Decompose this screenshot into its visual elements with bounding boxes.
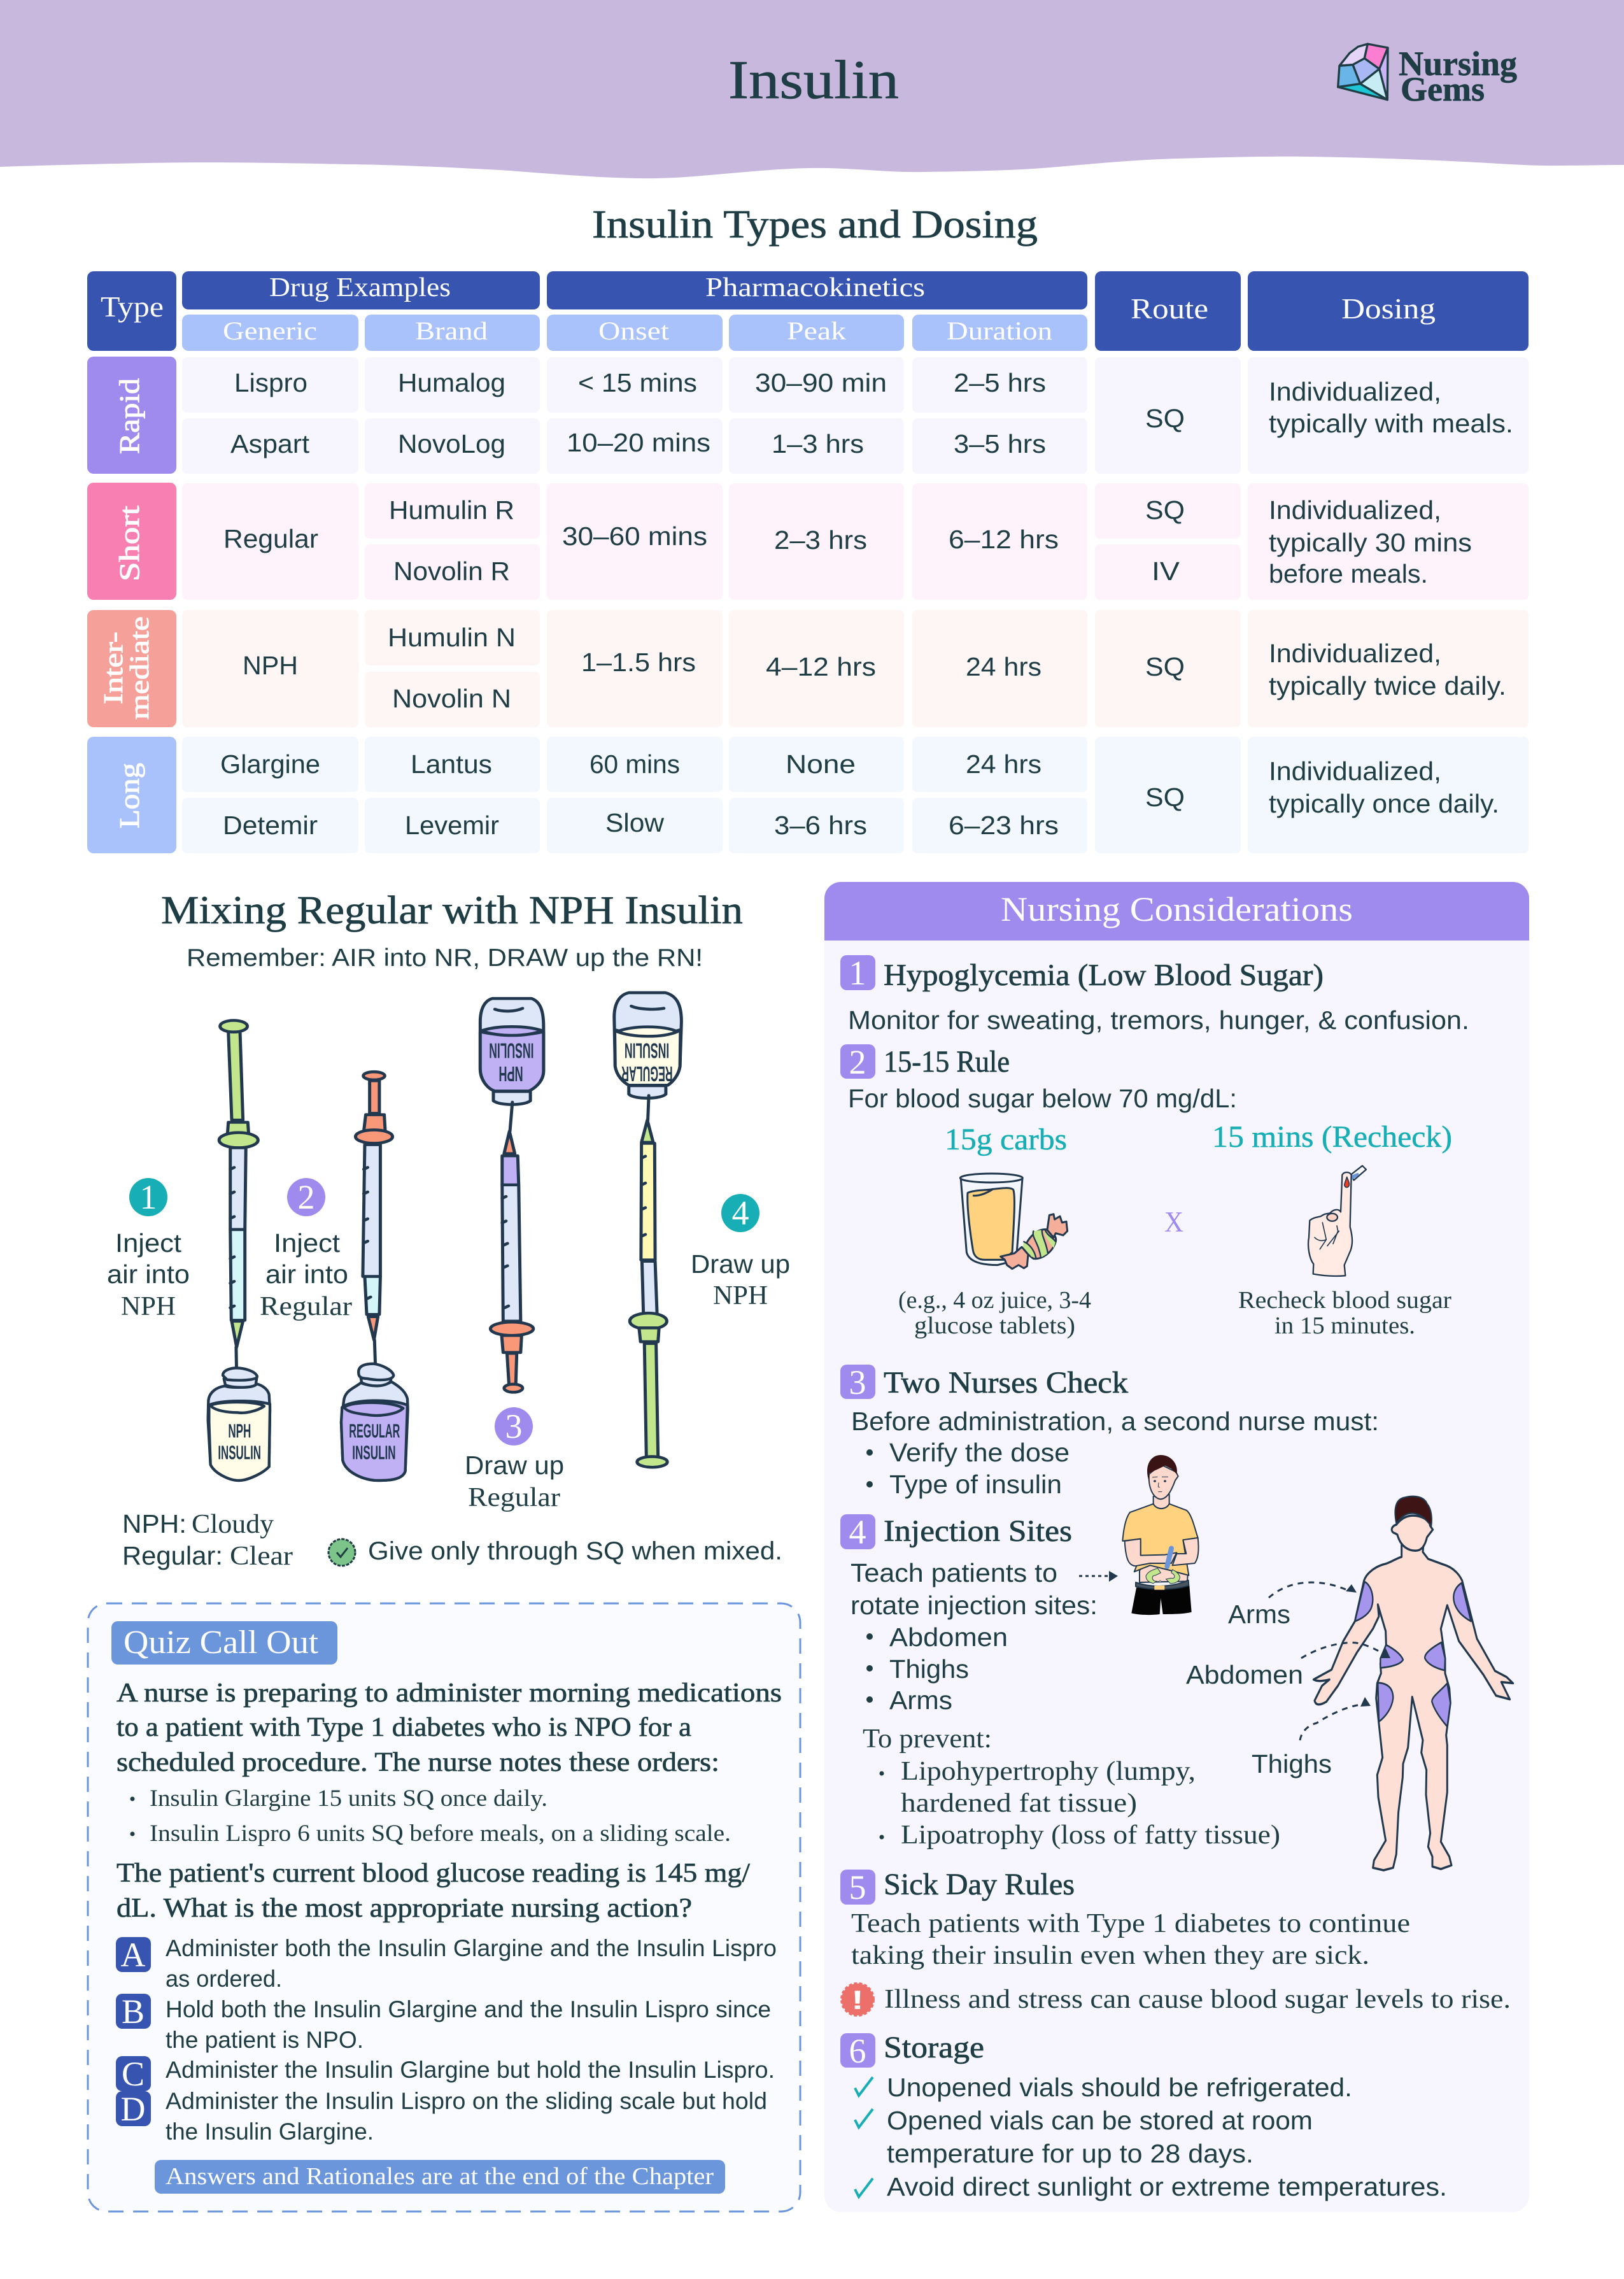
step 2: 2 bbox=[298, 1178, 314, 1216]
item 4: injection sites: 4 bbox=[849, 1513, 866, 1551]
syringe 2 bbox=[355, 1072, 393, 1368]
syringe 4 with inverted Regular vial: REGULAR bbox=[621, 1061, 673, 1085]
label: thighs: Thighs bbox=[1252, 1749, 1332, 1778]
row: Short: 30–60 mins bbox=[562, 522, 707, 551]
quiz orders list: Insulin Lispro 6 units SQ before meals, on a sliding scale. bbox=[150, 1821, 731, 1847]
row: Intermediate: mediate bbox=[125, 616, 155, 720]
option D: D bbox=[121, 2090, 145, 2128]
row: Intermediate: Individualized, bbox=[1269, 639, 1441, 668]
row: Long: 3–6 hrs bbox=[774, 811, 867, 840]
panel: nursing considerations bbox=[824, 882, 1529, 2212]
item 2: 15-15 rule: For blood sugar below 70 mg/dL: bbox=[848, 1084, 1237, 1113]
option A: Administer both the Insulin Glargine and the Insulin Lispro bbox=[166, 1935, 777, 1961]
row: Long: Individualized, bbox=[1269, 756, 1441, 786]
row: Intermediate: Inter- bbox=[99, 632, 129, 704]
vial: NPH: NPH bbox=[228, 1420, 251, 1442]
step 1: NPH bbox=[121, 1292, 176, 1321]
row: Intermediate: typically twice daily. bbox=[1269, 671, 1506, 700]
item 5: sick day rules: Illness and stress can cause blood sugar levels to rise. bbox=[884, 1985, 1511, 2014]
storage checklist: Opened vials can be stored at room bbox=[887, 2106, 1313, 2135]
table header row: Generic bbox=[223, 316, 317, 345]
row: Long: 24 hrs bbox=[966, 749, 1041, 779]
option A bbox=[116, 1935, 777, 1992]
row: Short: Novolin R bbox=[393, 557, 510, 586]
item 5: sick day rules bbox=[840, 1868, 1511, 2015]
item 4: injection sites: Injection Sites bbox=[884, 1514, 1072, 1548]
step 1: air into bbox=[107, 1260, 190, 1289]
table header row: Onset bbox=[598, 316, 669, 345]
item 4: injection sites: rotate injection sites: bbox=[851, 1591, 1098, 1620]
step 3 bbox=[465, 1407, 564, 1512]
table header row: Peak bbox=[787, 316, 846, 345]
icon: alert: ! bbox=[851, 1985, 864, 2015]
item 2: 15-15 rule bbox=[840, 1043, 1452, 1339]
row: Long: Long bbox=[114, 763, 145, 828]
item 3: two nurses check: Verify the dose bbox=[889, 1438, 1070, 1467]
option B: Hold both the Insulin Glargine and the Insulin Lispro since bbox=[166, 1996, 771, 2022]
option D: Administer the Insulin Lispro on the sliding scale but hold bbox=[166, 2088, 767, 2114]
label: abdomen: Abdomen bbox=[1186, 1660, 1303, 1689]
row: Short: SQ bbox=[1145, 495, 1185, 525]
arrow to patient bbox=[1079, 1571, 1118, 1582]
step 3: 3 bbox=[505, 1407, 522, 1445]
row: Long: None bbox=[786, 749, 856, 779]
label: arms bbox=[1228, 1582, 1357, 1629]
title: Insulin bbox=[728, 49, 899, 110]
step 4: 4 bbox=[732, 1194, 749, 1232]
row: Long: Glargine bbox=[220, 749, 320, 779]
legend: cloudy vs clear: NPH: bbox=[122, 1509, 187, 1538]
option A: as ordered. bbox=[166, 1966, 282, 1992]
syringe 1 bbox=[219, 1020, 258, 1375]
vial: Regular: INSULIN bbox=[352, 1442, 396, 1464]
step 2: Inject bbox=[274, 1228, 341, 1258]
item 2: 15-15 rule: 2 bbox=[849, 1043, 866, 1081]
row: Long: 6–23 hrs bbox=[949, 811, 1059, 840]
item 5: sick day rules: 5 bbox=[849, 1868, 866, 1906]
row: Intermediate: NPH bbox=[243, 651, 298, 680]
panel header: Nursing Considerations bbox=[1001, 890, 1353, 928]
logo: Nursing Gems bbox=[1338, 44, 1517, 108]
table header row: Pharmacokinetics bbox=[705, 273, 925, 302]
step 4: NPH bbox=[713, 1281, 768, 1310]
row: Intermediate: 4–12 hrs bbox=[766, 652, 876, 681]
table header row: Brand bbox=[415, 316, 488, 345]
15g carbs label: 15g carbs bbox=[945, 1123, 1067, 1156]
option C bbox=[116, 2055, 775, 2093]
row: Rapid: Humalog bbox=[398, 368, 505, 397]
vial: NPH and Regular insulin bbox=[208, 1364, 408, 1480]
option D bbox=[116, 2088, 767, 2145]
icon: body injection site map bbox=[1313, 1496, 1513, 1870]
quiz orders list: Insulin Glargine 15 units SQ once daily. bbox=[150, 1786, 547, 1812]
panel: quiz call out bbox=[88, 1603, 800, 2212]
step 1: Inject bbox=[115, 1228, 182, 1258]
row: Long: 60 mins bbox=[590, 749, 680, 779]
item 4: injection sites: Abdomen bbox=[889, 1622, 1008, 1652]
row: Short: Regular bbox=[223, 524, 318, 553]
item 4: injection sites: Lipohypertrophy (lumpy, bbox=[901, 1757, 1196, 1786]
legend: cloudy vs clear: Clear bbox=[230, 1542, 293, 1571]
icon: green check badge bbox=[328, 1539, 355, 1566]
syringe 4 with inverted Regular vial bbox=[614, 993, 681, 1467]
row: Long: Slow bbox=[605, 808, 664, 837]
item 3: two nurses check bbox=[840, 1363, 1379, 1499]
icon: finger blood test bbox=[1308, 1166, 1366, 1276]
item 1: hypoglycemia bbox=[840, 954, 1469, 1035]
syringe 4 with inverted Regular vial: INSULIN bbox=[625, 1039, 669, 1062]
quiz scenario bbox=[117, 1679, 782, 1777]
row: Short: IV bbox=[1152, 557, 1180, 586]
label: arms: Arms bbox=[1228, 1600, 1290, 1629]
answers note: Answers and Rationales are at the end of the Chapter bbox=[166, 2163, 714, 2190]
row: Long bbox=[87, 737, 1529, 853]
caption: carbs bbox=[898, 1287, 1091, 1339]
row: Short: Short bbox=[114, 506, 145, 581]
option C: Administer the Insulin Glargine but hold the Insulin Lispro. bbox=[166, 2057, 775, 2083]
item 3: two nurses check: Two Nurses Check bbox=[884, 1366, 1128, 1400]
caption: recheck bbox=[1238, 1287, 1451, 1339]
label: abdomen bbox=[1186, 1643, 1390, 1689]
quiz scenario: A nurse is preparing to administer morning medications bbox=[117, 1679, 782, 1708]
item 1: hypoglycemia: Hypoglycemia (Low Blood Sugar) bbox=[884, 958, 1324, 992]
row: Intermediate: Humulin N bbox=[388, 623, 516, 652]
syringe 3 with inverted NPH vial bbox=[480, 998, 544, 1392]
row: Rapid: < 15 mins bbox=[578, 368, 697, 397]
row: Short: Humulin R bbox=[389, 495, 514, 525]
note: give only through SQ: Give only through SQ when mixed. bbox=[368, 1537, 782, 1565]
row: Intermediate bbox=[87, 610, 1529, 727]
syringe 3 with inverted NPH vial: NPH bbox=[498, 1061, 523, 1085]
storage checklist bbox=[855, 2073, 1447, 2201]
item 6: storage: 6 bbox=[849, 2032, 866, 2070]
row: Rapid: Individualized, bbox=[1269, 377, 1441, 406]
row: Long: typically once daily. bbox=[1269, 789, 1499, 818]
item 1: hypoglycemia: 1 bbox=[849, 954, 866, 992]
quiz question bbox=[117, 1859, 750, 1923]
icon: alert bbox=[842, 1984, 873, 2015]
quiz tag bbox=[111, 1621, 337, 1665]
item 4: injection sites: Thighs bbox=[889, 1654, 969, 1684]
mnemonic: Remember: AIR into NR, DRAW up the RN! bbox=[187, 944, 703, 972]
icon: patient injecting abdomen bbox=[1122, 1455, 1199, 1615]
storage checklist: temperature for up to 28 days. bbox=[887, 2139, 1253, 2168]
illustration: syringes bbox=[219, 993, 681, 1467]
step 1: 1 bbox=[140, 1178, 157, 1216]
row: Rapid: typically with meals. bbox=[1269, 409, 1513, 438]
table header row bbox=[87, 271, 1529, 351]
header banner bbox=[0, 0, 1624, 178]
15 mins label: 15 mins (Recheck) bbox=[1212, 1120, 1452, 1154]
item 6: storage bbox=[840, 2031, 1447, 2201]
row: Short: before meals. bbox=[1269, 559, 1428, 588]
row: Rapid: Rapid bbox=[114, 378, 145, 454]
option D: the Insulin Glargine. bbox=[166, 2119, 374, 2145]
item 3: two nurses check: Before administration, a second nurse must: bbox=[851, 1407, 1379, 1436]
item 4: injection sites: Lipoatrophy (loss of fatty tissue) bbox=[901, 1821, 1280, 1850]
table header row: Duration bbox=[947, 316, 1052, 345]
heading: mixing: Mixing Regular with NPH Insulin bbox=[161, 889, 743, 932]
step 3: Draw up bbox=[465, 1451, 564, 1480]
vial: NPH bbox=[208, 1368, 270, 1480]
operator X: X bbox=[1164, 1205, 1183, 1238]
step 1 bbox=[107, 1178, 190, 1321]
step 2 bbox=[260, 1178, 352, 1321]
option B: B bbox=[122, 1992, 145, 2031]
row: Long: Lantus bbox=[411, 749, 492, 779]
item 4: injection sites: hardened fat tissue) bbox=[901, 1789, 1137, 1818]
row: Short: Individualized, bbox=[1269, 495, 1441, 525]
row: Rapid: Aspart bbox=[230, 429, 310, 458]
caption: recheck: in 15 minutes. bbox=[1274, 1312, 1415, 1339]
item 4: injection sites: Teach patients to bbox=[851, 1558, 1057, 1587]
quiz scenario: to a patient with Type 1 diabetes who is NPO for a bbox=[117, 1713, 691, 1742]
syringe 3 with inverted NPH vial: INSULIN bbox=[489, 1039, 534, 1062]
item 3: two nurses check: 3 bbox=[849, 1363, 866, 1402]
row: Intermediate: 1–1.5 hrs bbox=[581, 648, 696, 677]
row: Short: typically 30 mins bbox=[1269, 528, 1472, 557]
option A: A bbox=[121, 1936, 145, 1974]
quiz question: dL. What is the most appropriate nursing action? bbox=[117, 1894, 692, 1923]
logo: Nursing Gems: Gems bbox=[1401, 70, 1485, 108]
item 1: hypoglycemia: Monitor for sweating, tremors, hunger, & confusion. bbox=[848, 1005, 1469, 1035]
caption: recheck: Recheck blood sugar bbox=[1238, 1287, 1451, 1314]
storage checklist: Avoid direct sunlight or extreme temperatures. bbox=[887, 2172, 1447, 2201]
item 5: sick day rules: Sick Day Rules bbox=[884, 1868, 1075, 1901]
step 2: Regular bbox=[260, 1292, 352, 1321]
option B bbox=[116, 1992, 771, 2053]
item 2: 15-15 rule: 15-15 Rule bbox=[884, 1045, 1010, 1079]
vial: NPH: INSULIN bbox=[218, 1442, 261, 1464]
storage checklist: Unopened vials should be refrigerated. bbox=[887, 2073, 1352, 2102]
quiz question: The patient's current blood glucose reading is 145 mg/ bbox=[117, 1859, 750, 1888]
item 5: sick day rules: taking their insulin even when they are sick. bbox=[851, 1941, 1369, 1970]
caption: carbs: glucose tablets) bbox=[914, 1312, 1075, 1339]
row: Intermediate: 24 hrs bbox=[966, 652, 1041, 681]
label: thighs bbox=[1252, 1697, 1371, 1778]
item 5: sick day rules: Teach patients with Type 1 diabetes to continue bbox=[851, 1909, 1410, 1938]
option C: C bbox=[122, 2055, 145, 2093]
item 3: two nurses check: Type of insulin bbox=[889, 1470, 1062, 1499]
icon: juice glass and candy bbox=[960, 1174, 1068, 1269]
row: Short bbox=[87, 483, 1529, 600]
row: Rapid bbox=[87, 357, 1529, 474]
row: Rapid: 3–5 hrs bbox=[954, 429, 1046, 458]
row: Rapid: NovoLog bbox=[398, 429, 505, 458]
table header row: Route bbox=[1131, 292, 1208, 325]
vial: Regular bbox=[341, 1364, 408, 1480]
row: Short: 2–3 hrs bbox=[774, 525, 867, 555]
table header row: Dosing bbox=[1341, 292, 1436, 325]
legend: cloudy vs clear bbox=[122, 1509, 293, 1571]
legend: cloudy vs clear: Cloudy bbox=[192, 1510, 274, 1539]
item 4: injection sites: Arms bbox=[889, 1686, 952, 1715]
vial: Regular: REGULAR bbox=[349, 1420, 400, 1442]
row: Rapid: Lispro bbox=[234, 368, 307, 397]
row: Short: 6–12 hrs bbox=[949, 525, 1059, 554]
row: Rapid: 30–90 min bbox=[755, 368, 887, 397]
caption: carbs: (e.g., 4 oz juice, 3-4 bbox=[898, 1287, 1091, 1314]
legend: cloudy vs clear: Regular: bbox=[122, 1541, 223, 1570]
row: Rapid: 10–20 mins bbox=[567, 428, 710, 457]
item 6: storage: Storage bbox=[884, 2031, 984, 2064]
table header row: Type bbox=[101, 290, 164, 323]
row: Rapid: 2–5 hrs bbox=[954, 368, 1046, 397]
quiz tag: Quiz Call Out bbox=[124, 1624, 319, 1661]
row: Rapid: 1–3 hrs bbox=[772, 429, 864, 458]
step 4: Draw up bbox=[691, 1249, 790, 1279]
option B: the patient is NPO. bbox=[166, 2027, 364, 2053]
panel: mixing regular with NPH insulin bbox=[107, 889, 790, 1571]
table: insulin types and dosing bbox=[87, 271, 1529, 853]
table header row: Drug Examples bbox=[269, 273, 451, 302]
quiz orders list bbox=[130, 1786, 731, 1847]
item 4: injection sites: To prevent: bbox=[863, 1724, 992, 1754]
step 2: air into bbox=[265, 1260, 348, 1289]
row: Intermediate: SQ bbox=[1145, 652, 1185, 681]
row: Long: Detemir bbox=[223, 811, 318, 840]
step 3: Regular bbox=[468, 1483, 560, 1512]
item 4: injection sites bbox=[840, 1455, 1513, 1870]
row: Long: Levemir bbox=[405, 811, 499, 840]
row: Long: SQ bbox=[1145, 783, 1185, 812]
row: Rapid: SQ bbox=[1145, 404, 1185, 433]
panel header bbox=[824, 882, 1529, 941]
logo: Nursing Gems: Nursing bbox=[1399, 45, 1517, 83]
quiz scenario: scheduled procedure. The nurse notes these orders: bbox=[117, 1748, 719, 1777]
step 4 bbox=[691, 1194, 790, 1310]
row: Intermediate: Novolin N bbox=[392, 684, 511, 713]
heading: Insulin Types and Dosing: Insulin Types and Dosing bbox=[592, 203, 1038, 246]
